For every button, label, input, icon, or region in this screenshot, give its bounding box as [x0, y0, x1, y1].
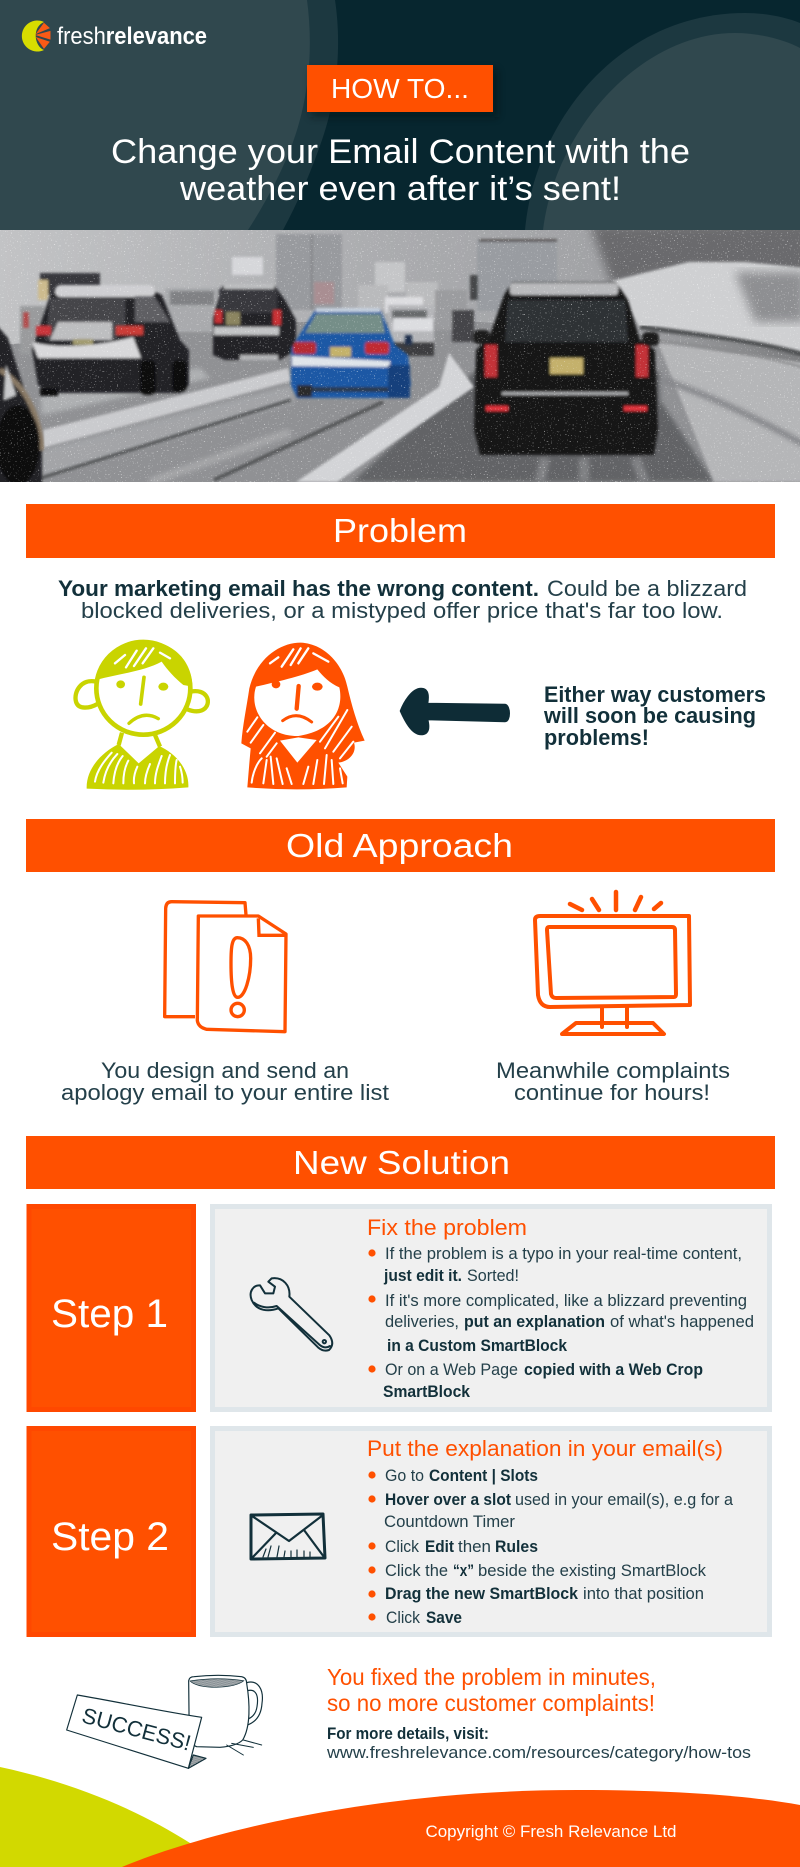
panel: step 1 fix the problem — [210, 1204, 772, 1412]
road surface — [9, 322, 676, 482]
caption: complaints continue: continue for hours! — [514, 1080, 710, 1105]
car: blue sedan — [291, 308, 412, 398]
icon: documents with exclamation mark — [165, 902, 286, 1032]
distant traffic — [20, 234, 557, 356]
icon: monitor with alert rays — [535, 892, 690, 1034]
caption: complaints continue — [496, 1058, 730, 1105]
mug — [189, 1675, 262, 1755]
bullet list: copied with a Web Crop — [524, 1361, 703, 1379]
section heading: problem — [26, 504, 775, 558]
bullet list: in a Custom SmartBlock — [387, 1337, 568, 1355]
heading: Fix the problem — [367, 1215, 527, 1240]
bullet list: Drag the new SmartBlock — [385, 1585, 579, 1603]
road snow strips — [43, 368, 291, 448]
title — [111, 133, 690, 208]
how to badge: HOW TO... — [331, 73, 469, 104]
bullet list: Sorted! — [467, 1267, 519, 1285]
more details link — [326, 1724, 751, 1762]
icon: unhappy man — [76, 641, 208, 790]
car: near left edge — [0, 323, 42, 490]
bullet list: beside the existing SmartBlock — [478, 1562, 707, 1580]
bullet list: Hover over a slot — [385, 1491, 511, 1509]
step 2 label box: Step 2 — [51, 1515, 169, 1559]
closing message — [327, 1664, 656, 1716]
closing message: You fixed the problem in minutes, — [327, 1664, 656, 1690]
icon: wrench — [251, 1278, 332, 1351]
caption: apology email: apology email to your entire list — [61, 1080, 389, 1105]
panel: step 2 put the explanation in your emails — [210, 1426, 772, 1637]
section heading: new solution — [26, 1136, 775, 1189]
icon: success sign and mug — [67, 1675, 262, 1768]
caption: apology email: You design and send an — [101, 1058, 349, 1083]
car: black SUV in foreground — [473, 282, 659, 455]
bullet list: Click — [386, 1609, 421, 1627]
title: weather even after it’s sent! — [179, 170, 621, 208]
bullet list: SmartBlock — [383, 1383, 471, 1401]
bullet list: put an explanation — [464, 1313, 605, 1331]
more details link: For more details, visit: — [327, 1724, 489, 1743]
sign: SUCCESS! — [79, 1703, 194, 1756]
icon: logo fruit — [22, 20, 50, 52]
bullet list: Click — [385, 1538, 420, 1556]
bullet list: Rules — [495, 1538, 538, 1556]
bullet list: Click the — [385, 1562, 448, 1580]
callout: customers causing problems: Either way customers — [544, 682, 766, 707]
caption: apology email — [61, 1058, 389, 1105]
falling snow speckle — [0, 230, 800, 482]
callout: customers causing problems — [543, 682, 766, 750]
step 2 label box — [26, 1426, 196, 1637]
bullet list: of what's happened — [610, 1313, 754, 1331]
bullet list: Go to — [385, 1467, 424, 1485]
bullet list: Content | Slots — [429, 1467, 538, 1485]
section heading: new solution: New Solution — [293, 1144, 510, 1181]
car: dark SUV — [213, 284, 296, 360]
bullet list: If it's more complicated, like a blizzard preventing — [385, 1292, 747, 1310]
section heading: old approach — [26, 819, 775, 872]
bullet list: Edit — [425, 1538, 454, 1556]
bullet list: into that position — [583, 1585, 704, 1603]
header background — [0, 0, 800, 230]
closing message: so no more customer complaints! — [327, 1690, 655, 1716]
wordmark: freshrelevance — [57, 23, 207, 50]
logo: fresh relevance — [22, 20, 207, 52]
problem text: blocked deliveries, or a mistyped offer price that's far too low. — [81, 598, 723, 623]
bullet list: then — [458, 1538, 491, 1556]
arrow pointing at the customers — [401, 689, 509, 734]
footer shape: orange curve — [122, 1790, 800, 1867]
caption: complaints continue: Meanwhile complaints — [496, 1058, 730, 1083]
sign — [67, 1695, 206, 1768]
bullet list — [368, 1245, 754, 1401]
car: snow covered SUV — [32, 285, 189, 396]
bullet list: “x” — [453, 1562, 474, 1580]
step 1 label box: Step 1 — [51, 1292, 168, 1336]
photo: snowy highway traffic — [0, 225, 800, 490]
bullet list: Countdown Timer — [384, 1513, 516, 1531]
problem text: Could be a blizzard — [547, 576, 747, 601]
bullet list — [368, 1467, 734, 1627]
bullet list: used in your email(s), e.g for a — [515, 1491, 734, 1509]
bullet list: just edit it. — [383, 1267, 462, 1285]
bullet list: Or on a Web Page — [385, 1361, 518, 1379]
how to badge — [307, 65, 497, 117]
callout: customers causing problems: will soon be causing — [543, 703, 756, 728]
section heading: old approach: Old Approach — [286, 827, 513, 864]
icon: envelope — [251, 1514, 325, 1559]
title: Change your Email Content with the — [111, 133, 690, 171]
step 1 label box — [26, 1204, 196, 1412]
more details link: www.freshrelevance.com/resources/category/how-tos — [326, 1743, 751, 1762]
heading: Put the explanation in your email(s) — [367, 1436, 723, 1461]
bullet list: Save — [426, 1609, 462, 1627]
problem text — [58, 576, 747, 623]
bullet list: deliveries, — [385, 1313, 459, 1331]
problem text: Your marketing email has the wrong content. — [58, 576, 539, 601]
copyright: Copyright © Fresh Relevance Ltd — [426, 1822, 676, 1841]
bullet list: If the problem is a typo in your real-time content, — [385, 1245, 742, 1263]
footer shape: lime curve — [0, 1767, 225, 1867]
section heading: problem: Problem — [333, 512, 467, 549]
callout: customers causing problems: problems! — [544, 725, 649, 750]
icon: unhappy woman — [241, 643, 365, 789]
